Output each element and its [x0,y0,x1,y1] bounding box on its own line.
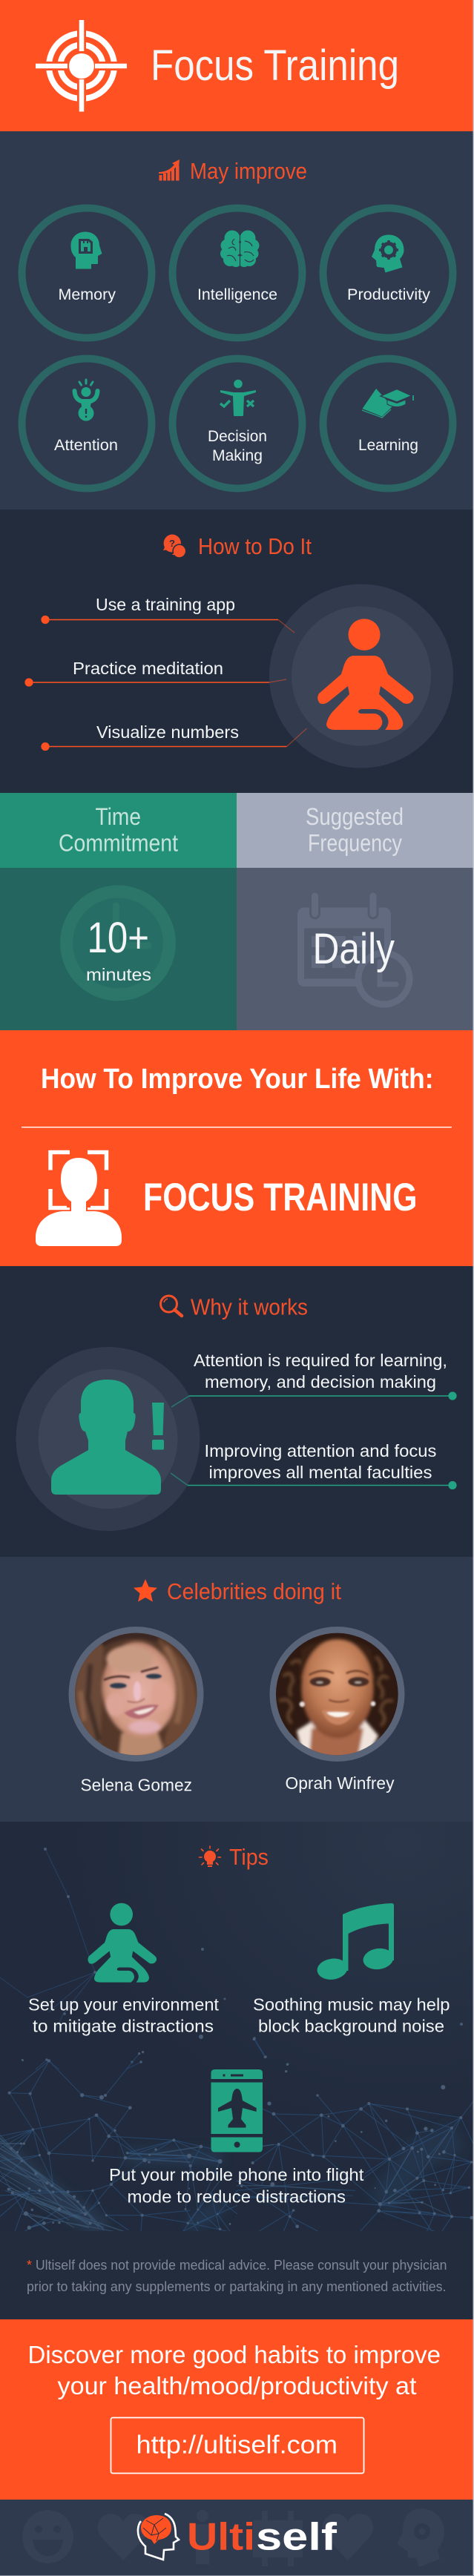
text: suggested frequency: Frequency [308,829,402,856]
portrait: selena gomez [68,1627,203,1762]
icon: person silhouette [51,1380,161,1495]
panel: disclaimer [0,2231,474,2319]
rings: benefit circles [22,208,452,488]
text: suggested frequency: Suggested [306,803,404,830]
icon: decision [220,380,256,416]
text: music tip: block background noise [258,2016,444,2035]
heading: focus training: FOCUS TRAINING [143,1176,417,1219]
text: music tip [253,1995,450,2035]
heading: celebrities: Celebrities doing it [167,1578,341,1604]
text: phone tip [109,2165,364,2206]
icon: speech bubbles [163,534,186,558]
label: decision making [208,428,267,464]
text: minutes: minutes [86,965,151,984]
text: phone tip: mode to reduce distractions [128,2187,346,2206]
icon: light bulb [199,1846,221,1866]
text: time commitment: Commitment [59,829,178,856]
panel: tips [0,1822,474,2231]
label: intelligence: Intelligence [197,286,277,303]
panel: suggested frequency [237,793,474,1030]
button: url [111,2418,363,2473]
wordmark: self [256,2516,338,2559]
panel: orange banner [0,1030,474,1266]
icon: magnifier [160,1296,182,1316]
icon: meditating figure [317,619,414,730]
diagram: attention circle [16,1347,200,1531]
icon: attention [74,380,98,421]
text: attention required: memory, and decision making [205,1372,436,1391]
callout lines [171,1391,457,1489]
text: practice meditation: Practice meditation [73,659,223,678]
panel: call to action [0,2319,474,2500]
logo: ultiself [138,2514,338,2560]
text: discover more: your health/mood/productivity at [58,2372,417,2399]
label: oprah winfrey: Oprah Winfrey [285,1773,395,1793]
background: network right [237,2038,473,2231]
heading: why it works: Why it works [191,1294,308,1320]
portrait: oprah winfrey [270,1627,405,1762]
icon: music note [316,1903,395,1981]
icon: clock [67,892,169,995]
text: time commitment: Time [95,803,141,830]
icon: speech bubbles: ? [169,538,175,549]
callout lines [24,616,307,751]
diagram: meditation circle [269,584,453,768]
icon: target crosshair [34,19,129,113]
label: decision making: Making [212,447,263,464]
icon: brain [220,229,260,268]
text: suggested frequency [306,803,404,856]
text: daily: Daily [313,925,395,973]
icon: brain head logo [138,2514,179,2560]
label: productivity: Productivity [347,286,431,303]
text: discover more [28,2341,441,2399]
panel: header [0,0,474,131]
icon: focus person [36,1153,122,1246]
text: improving attention: Improving attention and focus [205,1441,436,1460]
icon: learning [362,389,413,418]
panel: time commitment [0,793,237,1030]
heading: how to do it: How to Do It [198,533,312,559]
text: phone tip: Put your mobile phone into flight [109,2165,364,2184]
panel: footer [0,2500,474,2576]
panel: how to do it [0,510,474,793]
background: faint icons [22,2509,444,2567]
text: attention required: Attention is required for learning, [194,1351,447,1370]
text: environment tip [28,1995,219,2035]
text: visualize numbers: Visualize numbers [96,722,239,742]
heading: may improve: May improve [190,158,307,184]
wordmark [187,2516,338,2559]
text: disclaimer [27,2257,447,2294]
icon: star [134,1579,157,1602]
text: environment tip: Set up your environment [28,1995,219,2015]
text: use a training app: Use a training app [96,595,235,614]
icon: memory head [71,231,102,269]
heading: how to improve: How To Improve Your Life With: [41,1064,433,1095]
panel: may improve [0,131,474,510]
text: improving attention [205,1441,436,1482]
text: environment tip: to mitigate distractions [33,2016,214,2035]
text: attention required [194,1351,447,1391]
text: disclaimer: * Ultiself does not provide medical advice. Please consult your physician [27,2257,447,2273]
label: attention: Attention [54,437,118,454]
icon: rising chart [159,159,180,181]
title: Focus Training [151,42,399,90]
label: decision making: Decision [208,428,267,445]
panel: why it works [0,1266,474,1557]
icon: phone in flight mode [211,2069,263,2152]
text: discover more: Discover more good habits to improve [28,2341,441,2368]
label: learning: Learning [358,437,418,454]
icon: calendar clock [297,896,409,1004]
text: time commitment [59,803,178,856]
button: url: http://ultiself.com [136,2431,338,2460]
icon: seated figure [88,1903,157,1983]
icon: exclamation mark [152,1403,164,1449]
number: 10+: 10+ [88,914,149,962]
text: improving attention: improves all mental faculties [209,1463,432,1482]
icon: productivity head [372,234,404,273]
label: memory: Memory [58,286,116,303]
wordmark: Ulti [187,2516,255,2559]
text: music tip: Soothing music may help [253,1995,450,2015]
background: network left [0,2051,237,2231]
panel: celebrities [0,1557,474,1822]
heading: tips: Tips [229,1844,269,1870]
label: selena gomez: Selena Gomez [80,1776,192,1795]
background: upper network dots [0,1848,463,2069]
text: disclaimer: prior to taking any supplements or partaking in any mentioned activities. [27,2279,447,2294]
